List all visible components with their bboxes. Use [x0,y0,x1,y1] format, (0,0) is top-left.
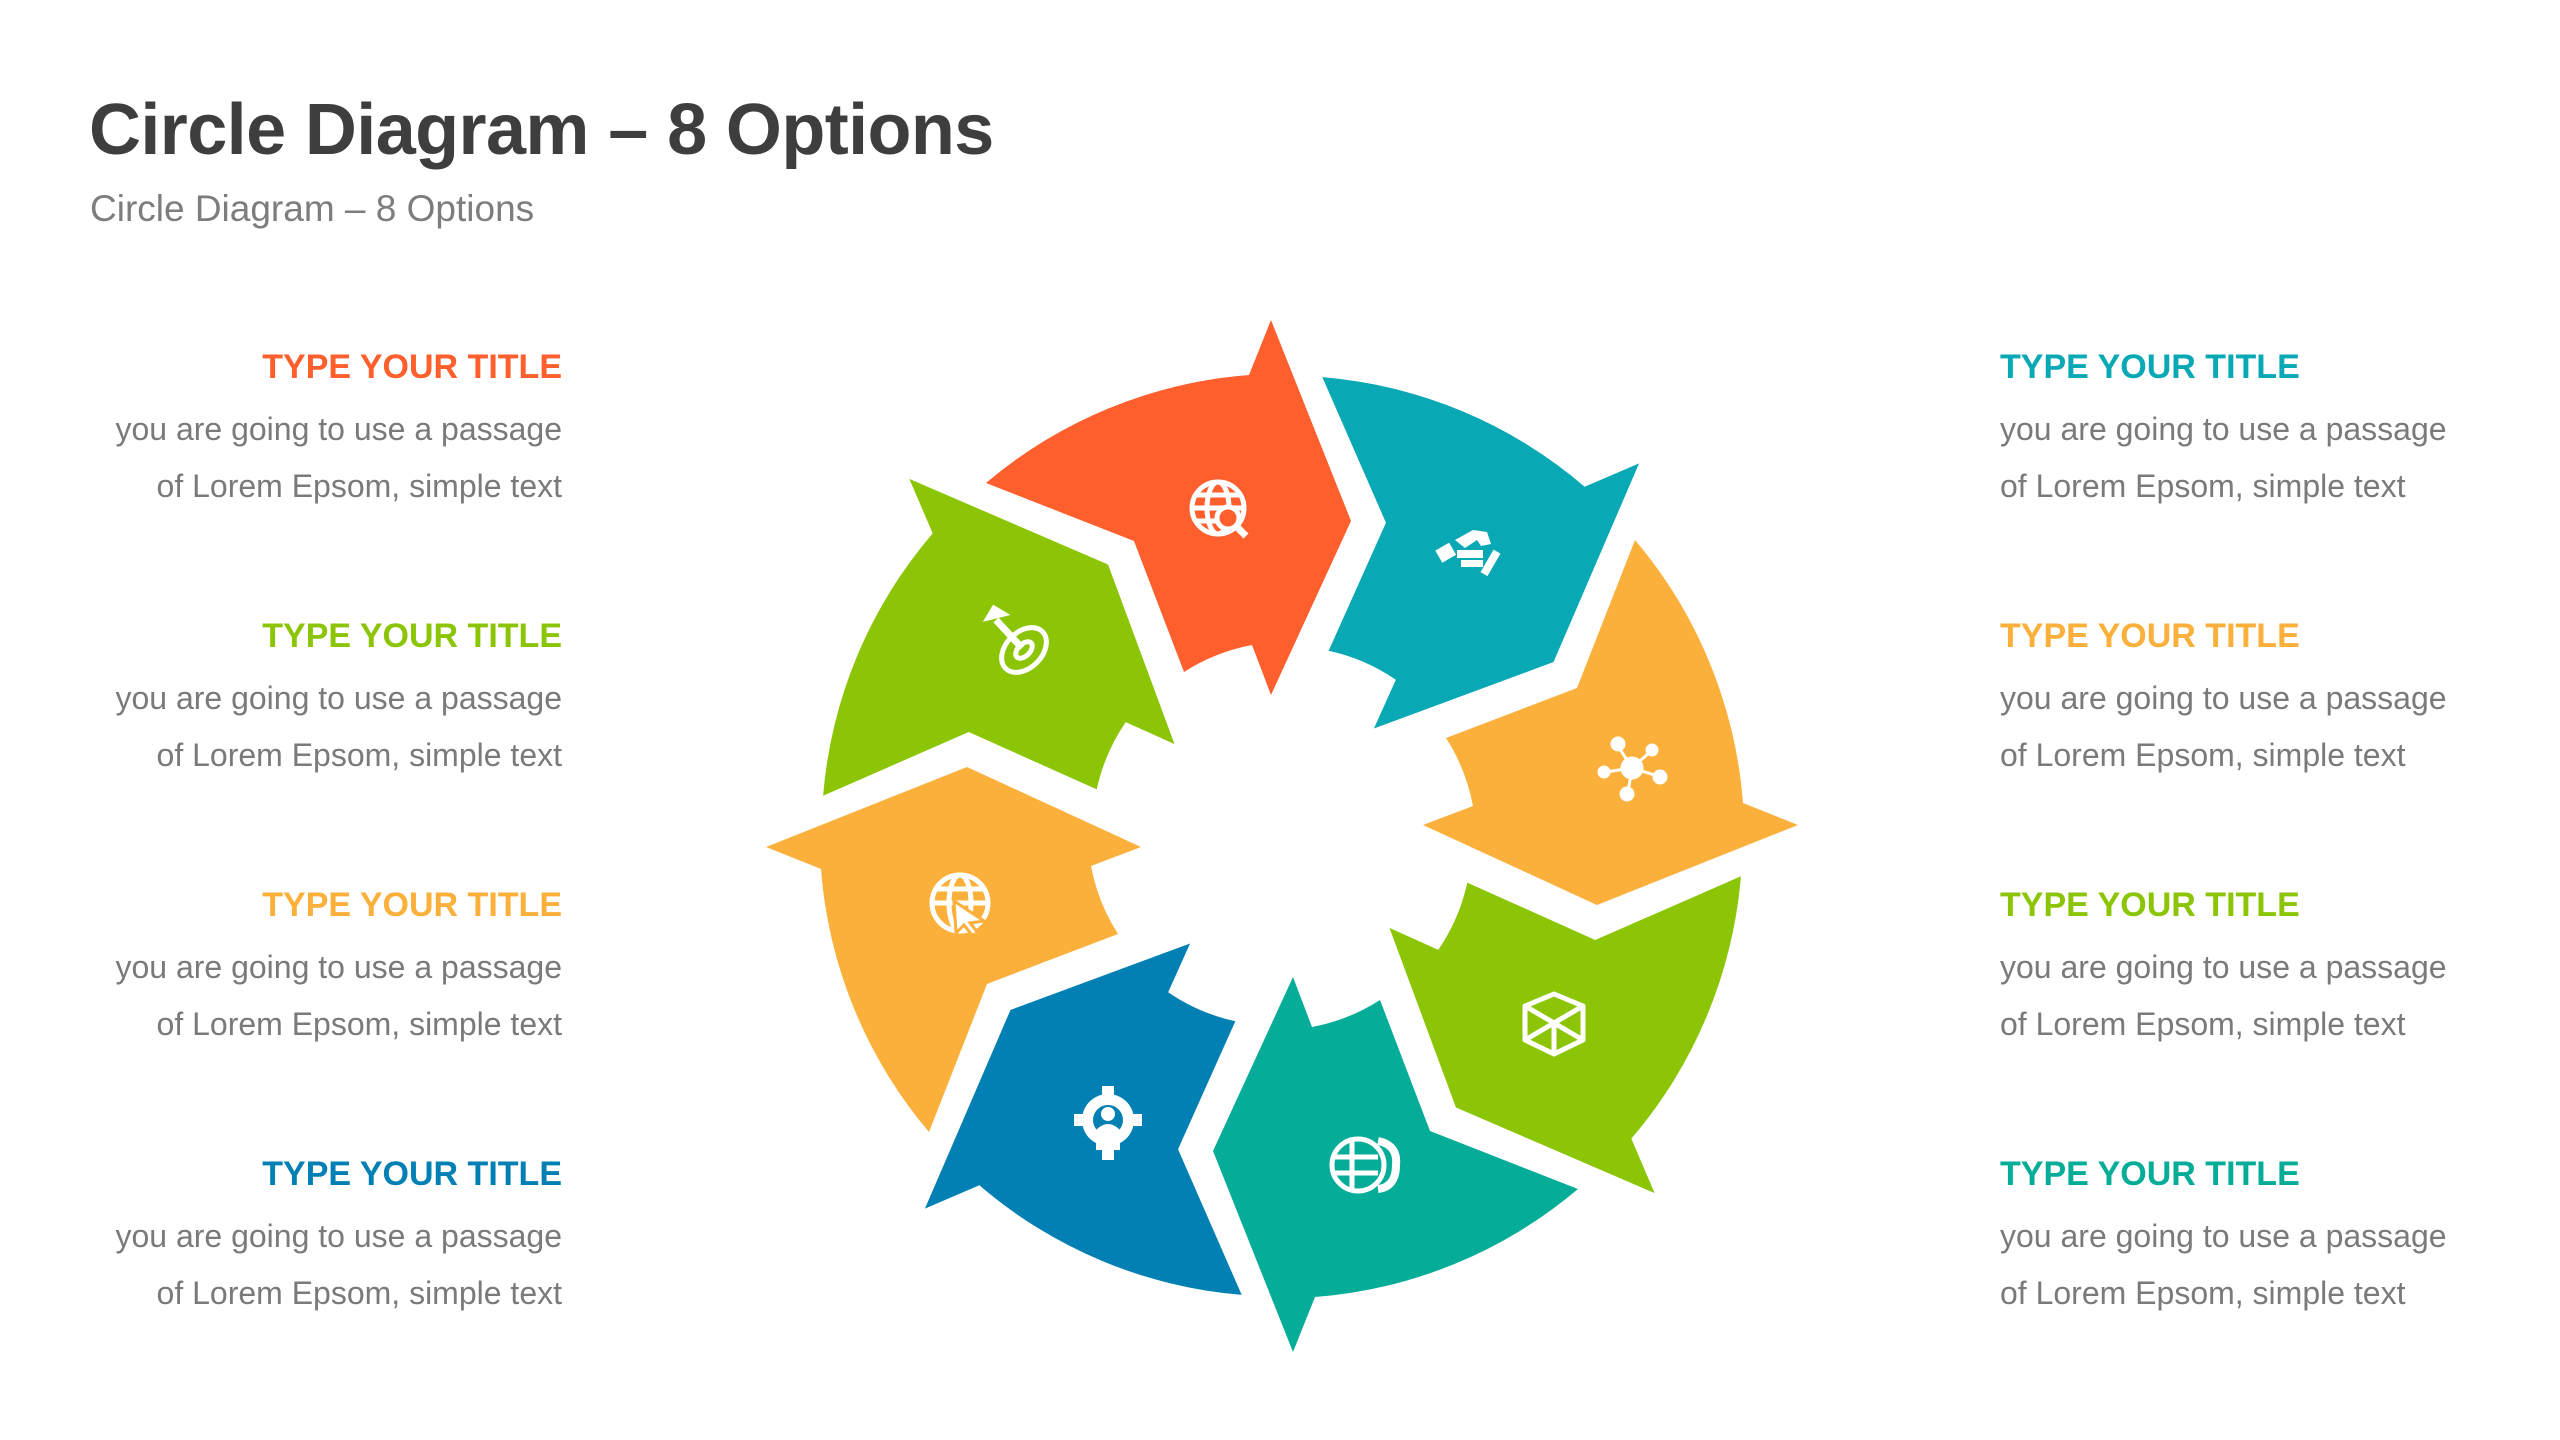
segment: teal green [1213,977,1578,1352]
text block: left 3 [115,886,562,1042]
icon: cube [1525,994,1583,1054]
segment: teal [1172,262,1696,785]
icon: network nodes [1599,738,1666,800]
segment: yellow left [766,767,1141,1132]
text block: right 2: TYPE YOUR TITLE [2000,617,2300,655]
text block: left 4 [115,1155,562,1311]
text block: left 2: TYPE YOUR TITLE [262,617,562,655]
text block: right 1 [2000,348,2447,504]
text block: left 3: of Lorem Epsom, simple text [157,1006,562,1042]
title: Circle Diagram – 8 Options [89,90,994,170]
icon: globe phone [1332,1139,1396,1191]
text block: left 1: TYPE YOUR TITLE [262,348,562,386]
subtitle: Circle Diagram – 8 Options [90,188,534,229]
text block: left 3: TYPE YOUR TITLE [262,886,562,924]
icon: globe search [1192,482,1246,536]
text block: right 2 [2000,617,2447,773]
text block: right 1: TYPE YOUR TITLE [2000,348,2300,386]
icon: handshake [1435,530,1500,576]
text block: right 3: TYPE YOUR TITLE [2000,886,2300,924]
segment: green right [1333,726,1856,1250]
text block: right 3: of Lorem Epsom, simple text [2000,1006,2405,1042]
text block: right 1: you are going to use a passage [2000,411,2447,447]
text block: right 1: of Lorem Epsom, simple text [2000,468,2405,504]
text block: right 4: TYPE YOUR TITLE [2000,1155,2300,1193]
segment: orange [986,320,1351,695]
icon: target arrow [988,608,1055,681]
text block: right 2: you are going to use a passage [2000,680,2447,716]
text block: left 1: you are going to use a passage [115,411,562,447]
text block: left 4: TYPE YOUR TITLE [262,1155,562,1193]
text block: left 1: of Lorem Epsom, simple text [157,468,562,504]
text block: right 4 [2000,1155,2447,1311]
text block: right 3: you are going to use a passage [2000,949,2447,985]
text block: right 4: you are going to use a passage [2000,1218,2447,1254]
text block: left 3: you are going to use a passage [115,949,562,985]
segment: yellow right [1423,540,1798,905]
text block: left 2: of Lorem Epsom, simple text [157,737,562,773]
segment: blue [868,887,1392,1410]
text block: right 2: of Lorem Epsom, simple text [2000,737,2405,773]
text block: left 4: you are going to use a passage [115,1218,562,1254]
text block: right 4: of Lorem Epsom, simple text [2000,1275,2405,1311]
text block: left 1 [115,348,562,504]
icon: globe cursor [932,875,988,935]
text block: left 2 [115,617,562,773]
text block: left 2: you are going to use a passage [115,680,562,716]
segment: green left [708,422,1231,946]
text block: right 3 [2000,886,2447,1042]
text block: left 4: of Lorem Epsom, simple text [157,1275,562,1311]
icon: gear person [1074,1086,1142,1160]
